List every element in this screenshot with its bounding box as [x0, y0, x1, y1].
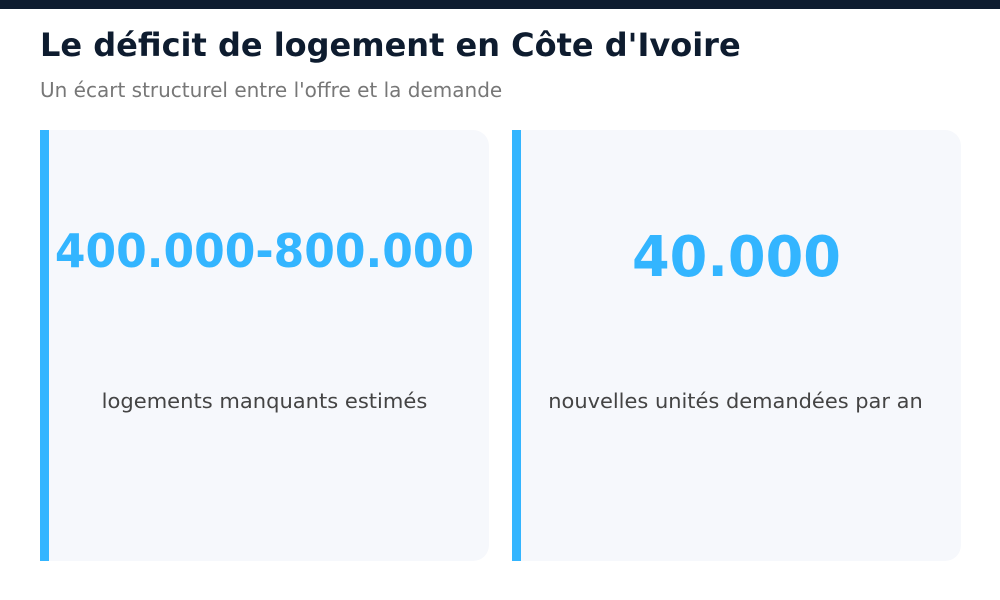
accent bar: [40, 130, 49, 561]
panel: housing shortage: [40, 130, 489, 561]
accent bar: [512, 130, 521, 561]
label: missing housing: logements manquants estimés: [102, 389, 427, 413]
panel: annual demand: [512, 130, 961, 561]
label: annual demand: nouvelles unités demandées par an: [548, 389, 923, 413]
top bar: [0, 0, 1000, 9]
title: Le déficit de logement en Côte d'Ivoire: [40, 26, 741, 64]
figure: annual demand: 40.000: [632, 225, 841, 290]
subtitle: Un écart structurel entre l'offre et la demande: [40, 78, 502, 102]
figure: missing housing: 400.000-800.000: [55, 224, 474, 278]
